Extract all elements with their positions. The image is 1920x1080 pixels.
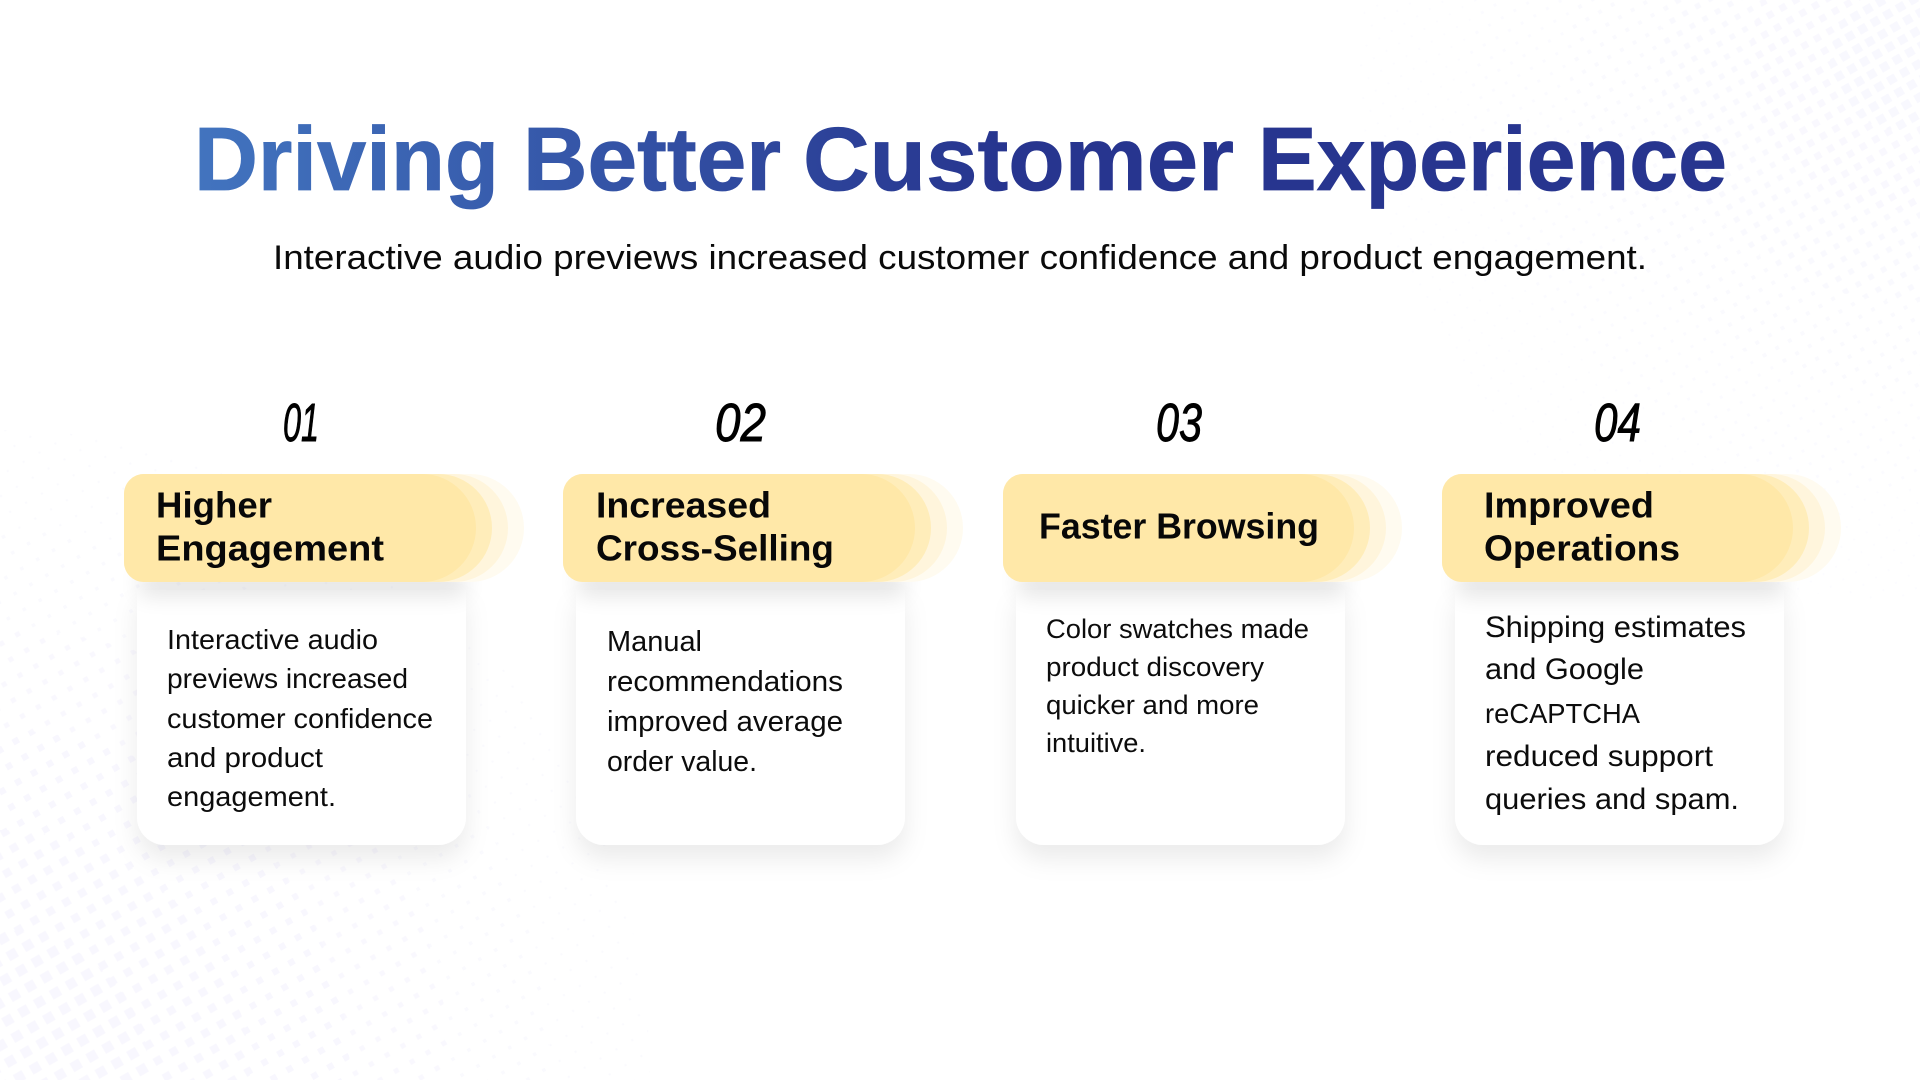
panel: faster browsing: [1003, 393, 1402, 845]
card text: intuitive.: [1046, 728, 1146, 758]
heading pill: [1442, 474, 1841, 582]
card text: order value.: [607, 745, 757, 777]
title: Driving: [194, 110, 499, 210]
heading text: [156, 484, 384, 568]
heading text: Engagement: [156, 528, 384, 568]
number 03: 03: [1156, 393, 1202, 453]
card body: [1016, 570, 1345, 845]
card text: reCAPTCHA: [1485, 698, 1641, 729]
card text: product discovery: [1046, 652, 1265, 682]
card text: queries and spam.: [1485, 783, 1739, 816]
card text: [1046, 614, 1309, 758]
card text: and product: [167, 742, 323, 773]
card text: Color swatches made: [1046, 614, 1309, 644]
heading pill: [563, 474, 963, 582]
heading text: [1484, 484, 1680, 568]
card text: [167, 624, 433, 812]
number 01: 01: [283, 393, 319, 453]
heading text: Increased: [596, 484, 771, 526]
card text: [1485, 611, 1746, 816]
card text: [607, 625, 843, 777]
heading text: Operations: [1484, 528, 1680, 568]
card text: improved average: [607, 705, 843, 737]
card text: customer confidence: [167, 703, 433, 734]
heading pill: [124, 474, 524, 582]
card text: recommendations: [607, 665, 843, 697]
subtitle: Interactive audio previews increased customer confidence and product engagement.: [273, 239, 1647, 277]
card text: reduced support: [1485, 740, 1714, 773]
card text: and Google: [1485, 653, 1644, 686]
title: Customer: [803, 110, 1234, 210]
heading text: Faster Browsing: [1039, 506, 1319, 546]
panel: higher engagement: [124, 393, 524, 845]
card body: [1455, 570, 1784, 845]
card body: [137, 570, 466, 845]
card text: Shipping estimates: [1485, 611, 1746, 644]
heading text: [596, 484, 834, 568]
card text: previews increased: [167, 663, 408, 694]
card body: [576, 570, 905, 845]
heading text: Improved: [1484, 484, 1654, 526]
heading pill: [1003, 474, 1402, 582]
card text: quicker and more: [1046, 690, 1259, 720]
card text: Interactive audio: [167, 624, 378, 655]
card text: engagement.: [167, 781, 336, 812]
title: [194, 110, 1727, 210]
number 02: 02: [715, 393, 766, 453]
heading text: Higher: [156, 484, 272, 526]
panel: increased cross-selling: [563, 393, 963, 845]
card text: Manual: [607, 625, 702, 657]
title: Experience: [1258, 110, 1727, 210]
title: Better: [523, 110, 781, 210]
number 04: 04: [1594, 393, 1641, 453]
panel: improved operations: [1442, 393, 1841, 845]
heading text: Cross-Selling: [596, 528, 834, 568]
